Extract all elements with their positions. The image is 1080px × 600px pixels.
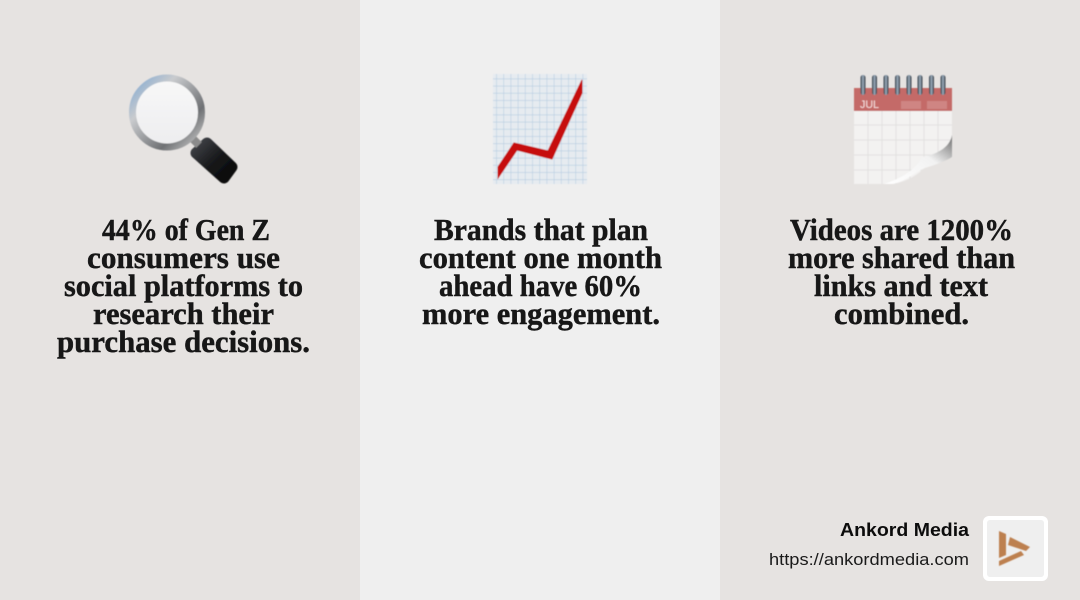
icon: brand logo — [983, 516, 1048, 581]
icon: calendar — [854, 75, 953, 185]
heading: left statistic: purchase decisions. — [57, 324, 310, 359]
heading: left statistic: consumers use — [87, 240, 280, 275]
heading: center statistic: Brands that plan — [434, 212, 648, 247]
heading: right statistic: combined. — [834, 296, 969, 331]
heading: right statistic — [788, 212, 1015, 331]
panel: left background — [0, 0, 360, 600]
heading: left statistic — [57, 212, 310, 359]
heading: center statistic: more engagement. — [422, 296, 660, 331]
heading: right statistic: links and text — [814, 268, 989, 303]
heading: right statistic: more shared than — [788, 240, 1015, 275]
heading: left statistic: 44% of Gen Z — [102, 212, 270, 247]
heading: right statistic: Videos are 1200% — [790, 212, 1013, 247]
heading: center statistic: ahead have 60% — [439, 268, 642, 303]
heading: center statistic: content one month — [419, 240, 662, 275]
heading: center statistic — [419, 212, 662, 331]
panel: center background — [360, 0, 720, 600]
panel: right background — [720, 0, 1080, 600]
icon: calendar: JUL — [860, 99, 879, 111]
brand name: Ankord Media — [840, 519, 970, 540]
brand url: https://ankordmedia.com — [769, 550, 969, 569]
icon: magnifying glass — [132, 78, 232, 178]
icon: rising chart — [493, 74, 587, 184]
heading: left statistic: social platforms to — [64, 268, 303, 303]
heading: left statistic: research their — [93, 296, 274, 331]
